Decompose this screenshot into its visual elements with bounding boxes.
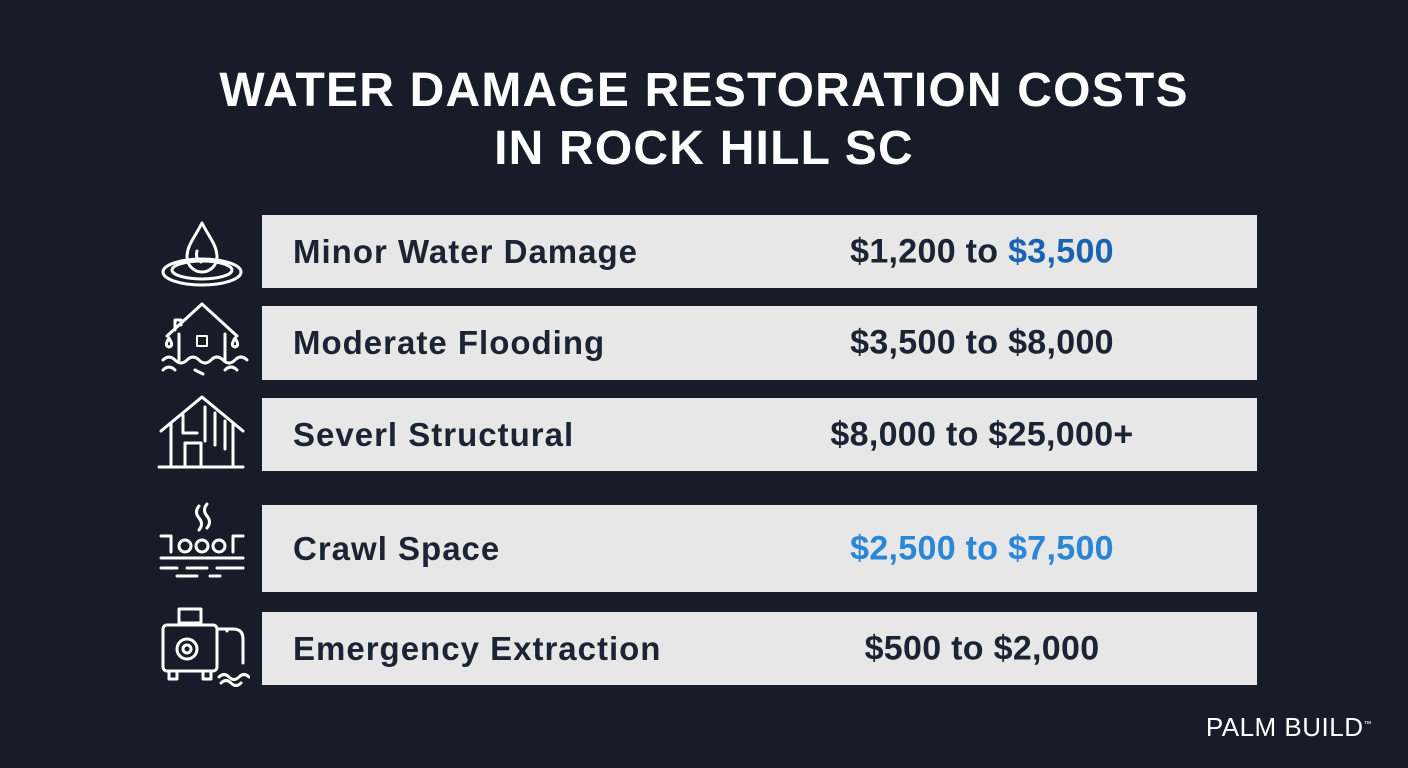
icon: extraction pump	[162, 608, 250, 687]
icon: structural house	[158, 396, 245, 468]
row: moderate	[262, 306, 1257, 380]
logo: PALM BUILD™	[1206, 712, 1372, 742]
row: severe: $8,000 to $25,000+	[830, 415, 1134, 453]
icon: water drop	[162, 221, 242, 286]
icon: crawl space	[160, 502, 244, 578]
row: severe: Severl Structural	[293, 416, 574, 452]
title: WATER DAMAGE RESTORATION COSTS	[219, 64, 1189, 117]
row: moderate: $3,500 to $8,000	[850, 324, 1114, 362]
row: severe	[262, 398, 1257, 471]
row: minor	[262, 215, 1257, 288]
icon: flooded house	[161, 302, 249, 376]
row: minor: Minor Water Damage	[293, 232, 638, 270]
row: emergency: Emergency Extraction	[293, 630, 661, 666]
title: IN ROCK HILL SC	[494, 122, 914, 175]
row: minor: $1,200 to $3,500	[850, 232, 1114, 270]
row: emergency	[262, 612, 1257, 685]
row: emergency: $500 to $2,000	[865, 629, 1099, 667]
row: crawl space: $2,500 to $7,500	[850, 529, 1114, 567]
row: crawl space	[262, 505, 1257, 592]
row: crawl space: Crawl Space	[293, 530, 500, 566]
title	[219, 64, 1189, 175]
row: moderate: Moderate Flooding	[293, 324, 605, 361]
